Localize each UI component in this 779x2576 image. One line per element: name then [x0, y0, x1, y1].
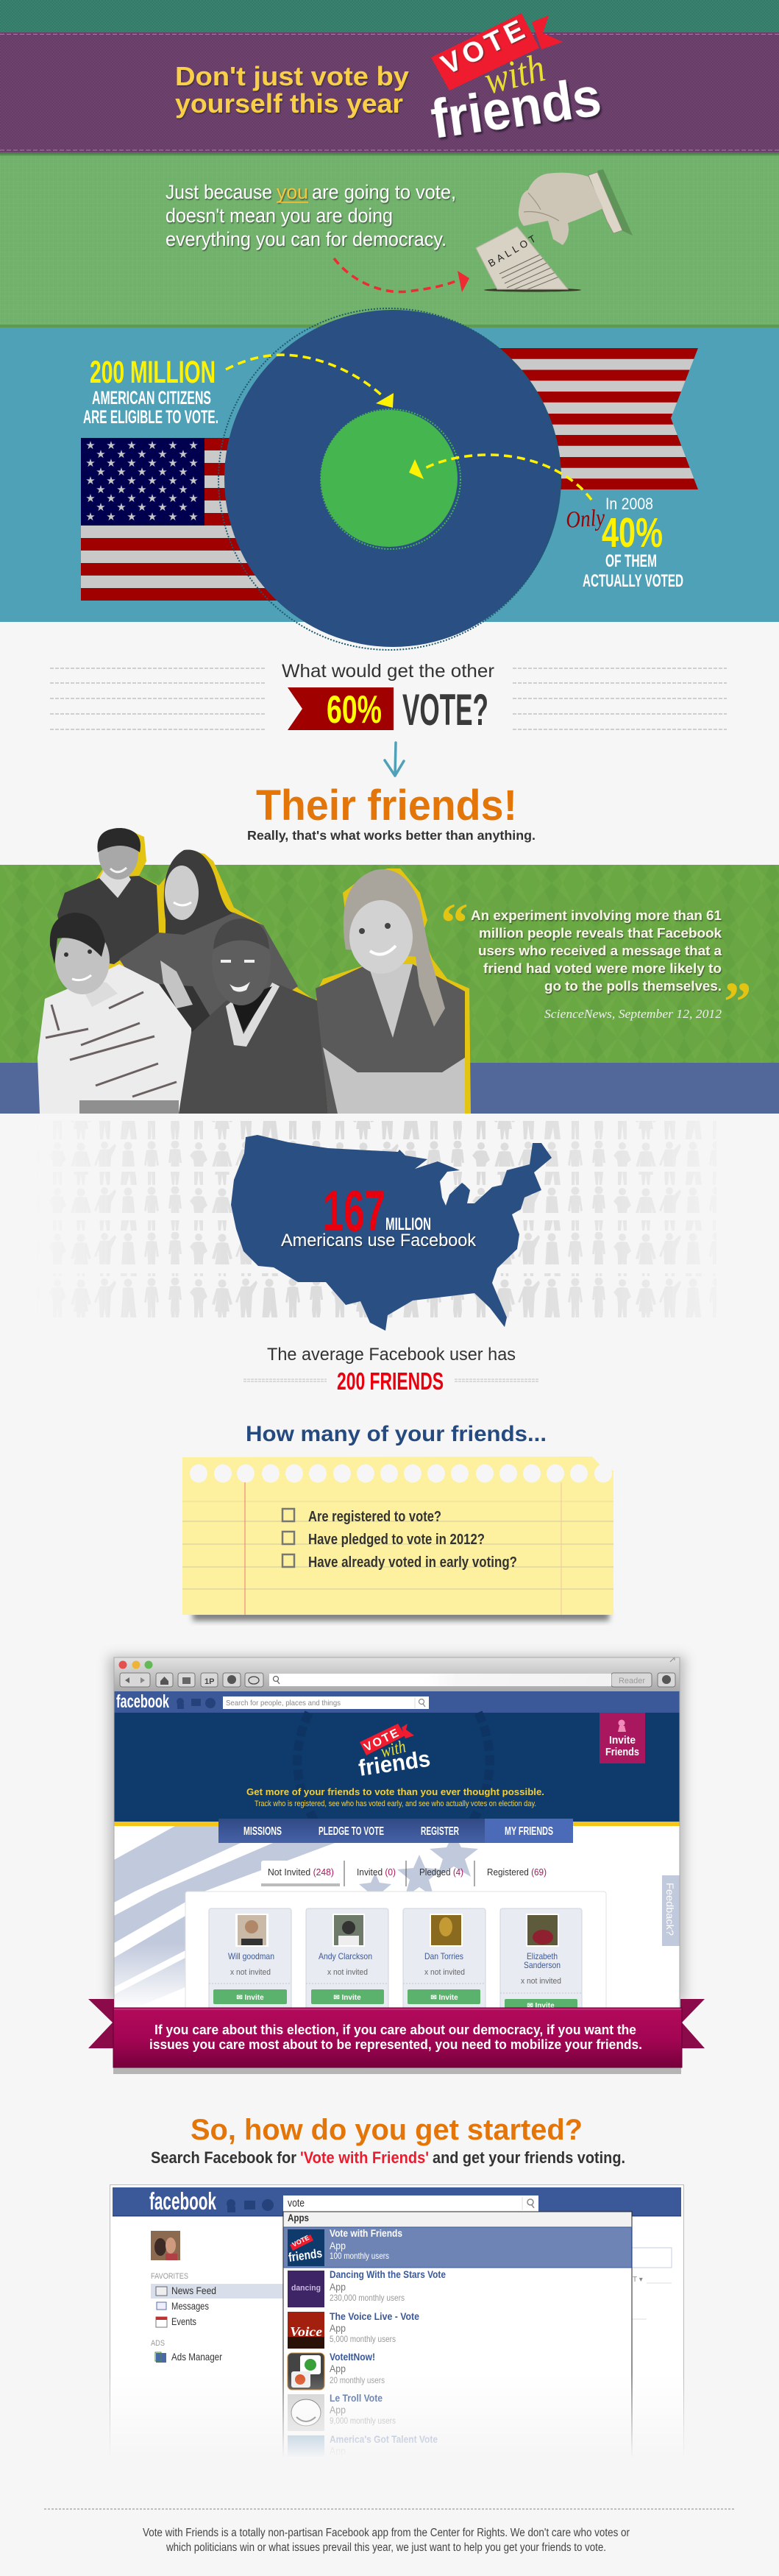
icon: american flag left: ★: [106, 439, 116, 452]
subheading: really: Really, that's what works better than anything.: [247, 828, 536, 843]
icon: american flag left: ★: [137, 448, 147, 461]
icon: american flag left: ★: [127, 511, 137, 523]
icon: american flag left: ★: [157, 501, 168, 514]
text: only 40 percent actually voted: In 2008: [605, 495, 653, 513]
icon: american flag left: ★: [116, 448, 127, 461]
icon: american flag left: ★: [147, 475, 157, 487]
result: Vote with Friends: VOTE: [291, 2234, 310, 2248]
result: America's Got Talent Vote: [288, 2433, 438, 2462]
heading: how many of your friends: How many of your friends...: [246, 1422, 547, 1446]
right column: [632, 2248, 672, 2319]
text: only 40 percent actually voted: [565, 495, 683, 591]
search dropdown: [283, 2212, 632, 2462]
subheading: search facebook: [151, 2148, 625, 2167]
icon: american flag left: ★: [85, 492, 96, 505]
icon: american flag left: ★: [188, 511, 199, 523]
search box: [283, 2195, 538, 2212]
filter tabs: Invited (0): [357, 1867, 396, 1878]
checklist: Have already voted in early voting?: [308, 1554, 517, 1571]
result: Le Troll Vote: Le Troll Vote: [330, 2392, 383, 2404]
icon: american flag left: ★: [85, 475, 96, 487]
panel: facebook search screenshot: [103, 2184, 691, 2467]
photo: group of friends: [38, 828, 471, 1114]
icon: american flag left: ★: [116, 501, 127, 514]
arrow: down: [385, 743, 404, 776]
checklist: [282, 1509, 517, 1571]
feedback tab: Feedback?: [664, 1883, 676, 1936]
friend card: Elizabeth Sanderson: ✉ Invite: [527, 2002, 555, 2010]
navigation tabs: PLEDGE TO VOTE: [319, 1825, 384, 1838]
icon: american flag left: ★: [157, 484, 168, 496]
logo small: friends: [357, 1746, 432, 1781]
icon: american flag left: ★: [127, 475, 137, 487]
ribbon: mobilize your friends: issues you care most about to be represented, you need to mobilize your friends.: [149, 2037, 642, 2052]
background stripes and stars: [114, 1826, 478, 2009]
icon: hand dropping ballot: BALLOT: [486, 233, 538, 269]
icon: american flag left: ★: [157, 466, 168, 478]
left navigation: Events: [171, 2315, 196, 2327]
friend card: Will goodman: x not invited: [230, 1968, 271, 1977]
logo: vote with friends: friends: [427, 66, 605, 150]
result: Vote with Friends: friends: [288, 2246, 323, 2265]
title: Don't just vote by: [175, 61, 409, 91]
stat: 167 million: Americans use Facebook: [281, 1231, 477, 1250]
result: Dancing With the Stars Vote: App: [330, 2281, 346, 2293]
icon: american flag left: ★: [127, 492, 137, 505]
icon: closing quote: ”: [724, 972, 752, 1033]
subheading: search facebook: 'Vote with Friends': [300, 2148, 429, 2167]
friend card: Dan Torries: ✉ Invite: [430, 1994, 458, 2002]
icon: american flag left: ★: [188, 475, 199, 487]
facebook bar: [114, 1691, 680, 1713]
navigation tabs: MY FRIENDS: [505, 1825, 553, 1838]
icon: american flag left: ★: [85, 511, 96, 523]
subheading: search facebook: Search Facebook for: [151, 2148, 296, 2167]
intro text: are going to vote,: [312, 181, 456, 203]
text: 200 million: [83, 355, 218, 428]
panel: yellow note: [182, 1457, 613, 1621]
person: back: [57, 828, 159, 964]
left navigation: News Feed: [171, 2285, 216, 2296]
app header: [114, 1713, 680, 1822]
filter tabs: [261, 1861, 547, 1886]
icon: american flag left: ★: [188, 439, 199, 452]
friend card: Elizabeth Sanderson: [500, 1908, 582, 2011]
quote text: [471, 907, 722, 994]
icon: american flag right: [485, 348, 706, 489]
browser toolbar: [114, 1657, 680, 1691]
result: Vote with Friends: [284, 2227, 631, 2268]
result: VoteItNow: VoteItNow!: [330, 2351, 375, 2363]
stat: 200 friends: [243, 1367, 538, 1395]
arrow: yellow to big circle: [226, 355, 394, 408]
heading: so how do you get started: So, how do you get started?: [191, 2114, 583, 2146]
filter tabs: Not Invited (248): [268, 1867, 334, 1878]
intro text: [166, 181, 456, 250]
footer text: which politicians win or what issues prevail this year, we just want to help you get your friends to vote.: [166, 2541, 606, 2554]
ribbon: 60 percent: [288, 687, 394, 732]
arrow: red dashed to ballot: [334, 258, 469, 292]
text: average facebook user: The average Facebook user has: [267, 1345, 516, 1365]
person: blonde woman: [316, 869, 465, 1114]
result: Le Troll Vote: App: [330, 2404, 346, 2416]
ribbon: mobilize your friends: If you care about this election, if you care about our democracy, if you want the: [154, 2023, 636, 2037]
icon: american flag left: ★: [106, 492, 116, 505]
browser frame: [114, 1657, 680, 2008]
filter tabs: Pledged (4): [419, 1867, 463, 1878]
facebook bar: facebook: [116, 1691, 169, 1712]
person: front middle: [179, 919, 328, 1114]
icon: american flag left: ★: [96, 448, 106, 461]
quote text: go to the polls themselves.: [544, 978, 722, 994]
navigation tabs: [218, 1819, 573, 1843]
navigation tabs: MISSIONS: [243, 1825, 282, 1838]
result: Vote with Friends: Vote with Friends: [330, 2227, 402, 2239]
panel: green intro band: [0, 152, 779, 328]
text: only 40 percent actually voted: 40%: [602, 509, 663, 556]
search dropdown: Apps: [288, 2212, 309, 2223]
right column: T ▾: [633, 2276, 643, 2284]
checklist: Have pledged to vote in 2012?: [308, 1532, 485, 1548]
icon: american flag left: ★: [168, 511, 178, 523]
stat: 200 friends: 200 FRIENDS: [337, 1367, 444, 1395]
icon: american flag left: ★: [116, 466, 127, 478]
logo small: VOTE: [362, 1727, 401, 1755]
quote text: users who received a message that a: [478, 943, 722, 958]
icon: american flag left: ★: [147, 457, 157, 470]
result: VoteItNow: [288, 2351, 385, 2390]
panel: browser screenshot: [109, 1656, 685, 2017]
icon: american flag left: ★: [137, 466, 147, 478]
filter tabs: Registered (69): [487, 1867, 547, 1878]
friend card: Elizabeth Sanderson: x not invited: [521, 1977, 561, 1986]
browser toolbar: 1P: [204, 1677, 214, 1686]
friend card: Andy Clarckson: ✉ Invite: [333, 1994, 361, 2002]
icon: american flag left: ★: [96, 466, 106, 478]
icon: american flag left: ★: [178, 448, 188, 461]
footer text: [143, 2527, 630, 2554]
friend card: Dan Torries: Dan Torries: [424, 1951, 463, 1961]
icon: american flag left: ★: [178, 484, 188, 496]
quote source: ScienceNews, September 12, 2012: [544, 1007, 722, 1021]
result: Dancing With the Stars Vote: 230,000 monthly users: [330, 2293, 405, 2303]
chart: big circle 200 million citizens: [218, 308, 561, 650]
friend card: Will goodman: Will goodman: [228, 1951, 274, 1961]
friend card: Elizabeth Sanderson: Elizabeth: [527, 1951, 558, 1961]
header icons: [227, 2199, 274, 2212]
person: woman in back: [119, 850, 298, 1052]
icon: american flag left: ★: [147, 492, 157, 505]
ribbon: 60 percent: 60%: [327, 688, 382, 732]
facebook logo: facebook: [149, 2187, 216, 2215]
result: Le Troll Vote: [288, 2392, 396, 2431]
icon: american flag left: ★: [147, 439, 157, 452]
icon: american flag left: ★: [168, 457, 178, 470]
icon: american flag left: ★: [85, 439, 96, 452]
logo: vote with friends: with: [480, 46, 549, 103]
left navigation: [151, 2231, 283, 2363]
logo: vote with friends: VOTE: [437, 15, 530, 81]
icon: american flag left: ★: [96, 501, 106, 514]
footer text: Vote with Friends is a totally non-partisan Facebook app from the Center for Rights. We don't care who votes or: [143, 2527, 630, 2539]
result: Vote with Friends: App: [330, 2240, 346, 2251]
friend card: Will goodman: ✉ Invite: [236, 1994, 264, 2002]
icon: american flag left: ★: [85, 457, 96, 470]
friend card: Elizabeth Sanderson: Sanderson: [524, 1960, 561, 1970]
result: Dancing With the Stars Vote: dancing: [291, 2284, 321, 2293]
text: only 40 percent actually voted: OF THEM: [605, 551, 657, 571]
text: only 40 percent actually voted: ACTUALLY VOTED: [583, 571, 683, 591]
icon: american flag left: ★: [178, 466, 188, 478]
browser toolbar: Reader: [619, 1677, 645, 1685]
facebook bar: Search for people, places and things: [226, 1699, 341, 1708]
feedback tab: [662, 1875, 680, 1946]
icon: american flag left: ★: [188, 457, 199, 470]
icon: american flag left: ★: [106, 475, 116, 487]
background: crowd silhouettes: [88, 1121, 691, 1317]
search box: vote: [288, 2197, 305, 2209]
text: vote question: VOTE?: [402, 685, 488, 735]
stat: 167 million: [281, 1178, 477, 1250]
intro text: everything you can for democracy.: [166, 228, 447, 250]
panel: purple title band: [0, 32, 779, 152]
result: The Voice Live: 5,000 monthly users: [330, 2334, 396, 2344]
result: The Voice Live: The Voice Live - Vote: [330, 2310, 419, 2322]
icon: american flag left: ★: [137, 484, 147, 496]
quote text: friend had voted were more likely to: [483, 960, 722, 976]
icon: american flag left: ★: [106, 511, 116, 523]
result: VoteItNow: App: [330, 2363, 346, 2374]
result: The Voice Live: App: [330, 2322, 346, 2334]
title: yourself this year: [175, 88, 403, 118]
question line: What would get the other: [282, 661, 494, 682]
text: 200 million: AMERICAN CITIZENS: [92, 388, 211, 408]
chart: small circle 40 percent voters: [321, 409, 460, 549]
intro text: Just because: [166, 181, 272, 203]
fade to page: [103, 2374, 691, 2458]
friend card: Andy Clarckson: x not invited: [327, 1968, 368, 1977]
logo small: [358, 1724, 430, 1776]
friend card: Andy Clarckson: [306, 1908, 388, 2011]
icon: american flag left: ★: [116, 484, 127, 496]
text: 200 million: 200 MILLION: [90, 355, 216, 390]
button: invite friends: [600, 1713, 645, 1763]
intro text: you: [277, 181, 308, 203]
result: VoteItNow: 20 monthly users: [330, 2375, 385, 2385]
icon: american flag left: [81, 438, 302, 601]
friend card: Dan Torries: x not invited: [424, 1968, 465, 1977]
button: invite friends: Invite: [609, 1734, 636, 1747]
quote text: million people reveals that Facebook: [479, 925, 722, 941]
text: only 40 percent actually voted: Only: [565, 503, 606, 533]
panel: blue statistics band: [0, 328, 779, 622]
title: [175, 61, 409, 118]
left navigation: Ads Manager: [171, 2351, 222, 2363]
stat: 167 million: 167: [323, 1178, 385, 1243]
result: Dancing With the Stars Vote: [288, 2268, 446, 2307]
heading: their friends: Their friends!: [256, 782, 517, 829]
text: 200 million: ARE ELIGIBLE TO VOTE.: [83, 407, 218, 428]
panel: top teal band: [0, 0, 779, 32]
icon: american flag left: ★: [147, 511, 157, 523]
friend card: Andy Clarckson: Andy Clarckson: [319, 1951, 372, 1961]
checklist: Are registered to vote?: [308, 1509, 441, 1525]
panel: 60 percent question: [50, 661, 727, 735]
icon: american flag left: ★: [127, 457, 137, 470]
navigation tabs: REGISTER: [421, 1825, 459, 1838]
arrow: yellow to small circle: [409, 455, 591, 500]
map: united states: [231, 1135, 552, 1331]
result: Le Troll Vote: 9,000 monthly users: [330, 2416, 396, 2426]
intro text: doesn't mean you are doing: [166, 205, 393, 227]
button: invite friends: Friends: [605, 1746, 639, 1758]
icon: american flag left: ★: [96, 484, 106, 496]
left navigation: FAVORITES: [151, 2272, 188, 2281]
result: Dancing With the Stars Vote: Dancing With the Stars Vote: [330, 2268, 446, 2280]
app header: Get more of your friends to vote than you ever thought possible.: [246, 1786, 544, 1797]
logo small: with: [379, 1737, 408, 1762]
result: The Voice Live: Voice: [290, 2324, 322, 2339]
icon: american flag left: ★: [157, 448, 168, 461]
icon: american flag left: ★: [127, 439, 137, 452]
result: The Voice Live: [288, 2310, 419, 2349]
icon: american flag left: ★: [178, 501, 188, 514]
friend card: Dan Torries: [403, 1908, 485, 2011]
result: America's Got Talent Vote: America's Got Talent Vote: [330, 2433, 438, 2445]
result: Vote with Friends: 100 monthly users: [330, 2251, 389, 2261]
icon: opening quote: “: [441, 893, 468, 954]
subheading: search facebook: and get your friends voting.: [433, 2148, 625, 2167]
icon: american flag left: ★: [188, 492, 199, 505]
icon: american flag left: ★: [168, 439, 178, 452]
footer rule: [44, 2508, 734, 2510]
stat: 167 million: MILLION: [385, 1214, 431, 1234]
quote text: An experiment involving more than 61: [471, 907, 722, 923]
logo: vote with friends: [427, 13, 605, 150]
result: America's Got Talent Vote: App: [330, 2445, 346, 2457]
icon: hand dropping ballot: [476, 169, 633, 293]
ribbon: mobilize your friends: [88, 1999, 705, 2074]
panel: friends photo and quote: [0, 828, 779, 1114]
left navigation: Messages: [171, 2300, 209, 2312]
person: front left: [38, 913, 193, 1114]
app header: Track who is registered, see who has voted early, and see who actually votes on election day.: [255, 1800, 536, 1808]
left navigation: ADS: [151, 2339, 165, 2348]
icon: american flag left: ★: [137, 501, 147, 514]
icon: american flag left: ★: [106, 457, 116, 470]
icon: american flag left: ★: [168, 492, 178, 505]
friend card: Will goodman: [209, 1908, 291, 2011]
icon: american flag left: ★: [168, 475, 178, 487]
friends card panel: [185, 1892, 606, 2017]
